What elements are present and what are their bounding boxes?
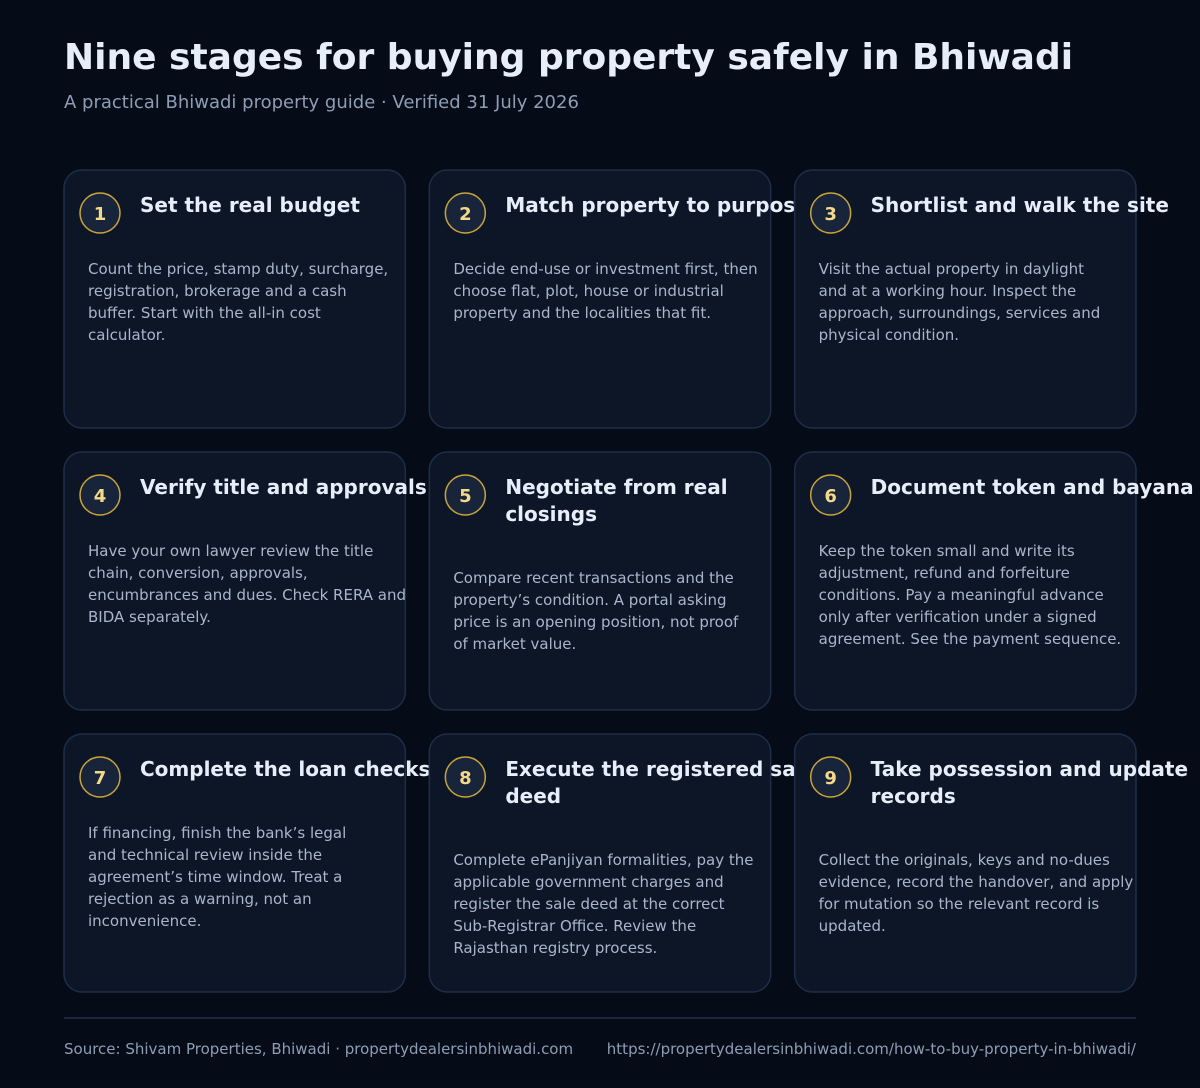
- text 5: [453, 569, 739, 653]
- text 3: approach, surroundings, services and: [819, 304, 1100, 322]
- panel: stage 2: [428, 169, 809, 429]
- heading 7: Complete the loan checks: [140, 757, 430, 781]
- panel: stage 3: [794, 169, 1169, 429]
- number badge 8: [445, 757, 485, 797]
- text 6: agreement. See the payment sequence.: [819, 630, 1121, 648]
- text 8: Sub-Registrar Office. Review the: [453, 917, 696, 935]
- number badge 5: [445, 475, 485, 515]
- text 2: property and the localities that fit.: [453, 304, 711, 322]
- heading 1: Set the real budget: [140, 193, 360, 217]
- heading 9: Take possession and update: [871, 757, 1188, 781]
- number badge 6: [811, 475, 851, 515]
- number badge 5: 5: [459, 486, 472, 507]
- text 9: Collect the originals, keys and no-dues: [819, 851, 1110, 869]
- number badge 2: 2: [459, 204, 472, 225]
- text 4: [88, 542, 406, 626]
- text 9: [818, 851, 1133, 935]
- footer url: https://propertydealersinbhiwadi.com/how-to-buy-property-in-bhiwadi/: [607, 1040, 1136, 1058]
- text 9: for mutation so the relevant record is: [819, 895, 1099, 913]
- text 9: evidence, record the handover, and apply: [819, 873, 1133, 891]
- text 8: register the sale deed at the correct: [453, 895, 725, 913]
- text 6: only after verification under a signed: [819, 608, 1097, 626]
- text 1: [88, 260, 388, 344]
- heading 9: records: [871, 784, 956, 808]
- number badge 3: 3: [824, 204, 837, 225]
- panel: stage 1: [63, 169, 406, 429]
- number badge 1: 1: [94, 204, 106, 225]
- text 5: property’s condition. A portal asking: [453, 591, 727, 609]
- heading 3: Shortlist and walk the site: [871, 193, 1169, 217]
- title: Nine stages for buying property safely in Bhiwadi: [64, 37, 1073, 78]
- heading 2: Match property to purpose: [505, 193, 809, 217]
- text 1: calculator.: [88, 326, 165, 344]
- panel: stage 9: [794, 733, 1188, 993]
- number badge 3: [811, 193, 851, 233]
- heading 8: deed: [505, 784, 561, 808]
- text 3: [818, 260, 1100, 344]
- panel: stage 8: [428, 733, 816, 993]
- text 1: buffer. Start with the all-in cost: [88, 304, 321, 322]
- number badge 6: 6: [824, 486, 837, 507]
- text 7: [88, 824, 346, 930]
- text 9: updated.: [819, 917, 886, 935]
- text 1: Count the price, stamp duty, surcharge,: [88, 260, 388, 278]
- text 2: [453, 260, 758, 322]
- heading 5: [505, 475, 728, 526]
- number badge 2: [445, 193, 485, 233]
- heading 4: Verify title and approvals: [140, 475, 427, 499]
- footer source: Source: Shivam Properties, Bhiwadi · propertydealersinbhiwadi.com: [64, 1040, 573, 1058]
- text 6: adjustment, refund and forfeiture: [819, 564, 1070, 582]
- heading 9: [870, 757, 1188, 808]
- text 3: Visit the actual property in daylight: [819, 260, 1084, 278]
- text 8: Complete ePanjiyan formalities, pay the: [453, 851, 753, 869]
- number badge 8: 8: [459, 768, 472, 789]
- heading 8: [505, 757, 816, 808]
- text 4: Have your own lawyer review the title: [88, 542, 373, 560]
- heading 5: closings: [505, 502, 597, 526]
- text 7: agreement’s time window. Treat a: [88, 868, 342, 886]
- text 6: conditions. Pay a meaningful advance: [819, 586, 1104, 604]
- text 4: chain, conversion, approvals,: [88, 564, 308, 582]
- text 1: registration, brokerage and a cash: [88, 282, 347, 300]
- text 5: Compare recent transactions and the: [453, 569, 734, 587]
- text 8: Rajasthan registry process.: [453, 939, 657, 957]
- subtitle: A practical Bhiwadi property guide · Verified 31 July 2026: [64, 92, 579, 113]
- number badge 4: [80, 475, 120, 515]
- number badge 4: 4: [94, 486, 106, 507]
- panel: stage 5: [428, 451, 772, 711]
- number badge 7: 7: [94, 768, 106, 789]
- text 5: of market value.: [453, 635, 576, 653]
- text 8: applicable government charges and: [453, 873, 724, 891]
- text 6: Keep the token small and write its: [819, 542, 1075, 560]
- panel: stage 4: [63, 451, 427, 711]
- text 7: If financing, finish the bank’s legal: [88, 824, 346, 842]
- number badge 9: [811, 757, 851, 797]
- text 3: and at a working hour. Inspect the: [819, 282, 1076, 300]
- text 6: [819, 542, 1121, 648]
- text 2: choose flat, plot, house or industrial: [453, 282, 724, 300]
- text 5: price is an opening position, not proof: [453, 613, 738, 631]
- panel: stage 6: [794, 451, 1194, 711]
- text 4: BIDA separately.: [88, 608, 211, 626]
- heading 6: Document token and bayana: [871, 475, 1194, 499]
- number badge 9: 9: [824, 768, 837, 789]
- text 7: and technical review inside the: [88, 846, 322, 864]
- text 7: rejection as a warning, not an: [88, 890, 312, 908]
- text 4: encumbrances and dues. Check RERA and: [88, 586, 406, 604]
- number badge 1: [80, 193, 120, 233]
- text 7: inconvenience.: [88, 912, 201, 930]
- text 2: Decide end-use or investment first, then: [453, 260, 758, 278]
- heading 5: Negotiate from real: [505, 475, 728, 499]
- panel: stage 7: [63, 733, 430, 993]
- number badge 7: [80, 757, 120, 797]
- text 3: physical condition.: [819, 326, 959, 344]
- heading 8: Execute the registered sale: [505, 757, 816, 781]
- text 8: [453, 851, 753, 957]
